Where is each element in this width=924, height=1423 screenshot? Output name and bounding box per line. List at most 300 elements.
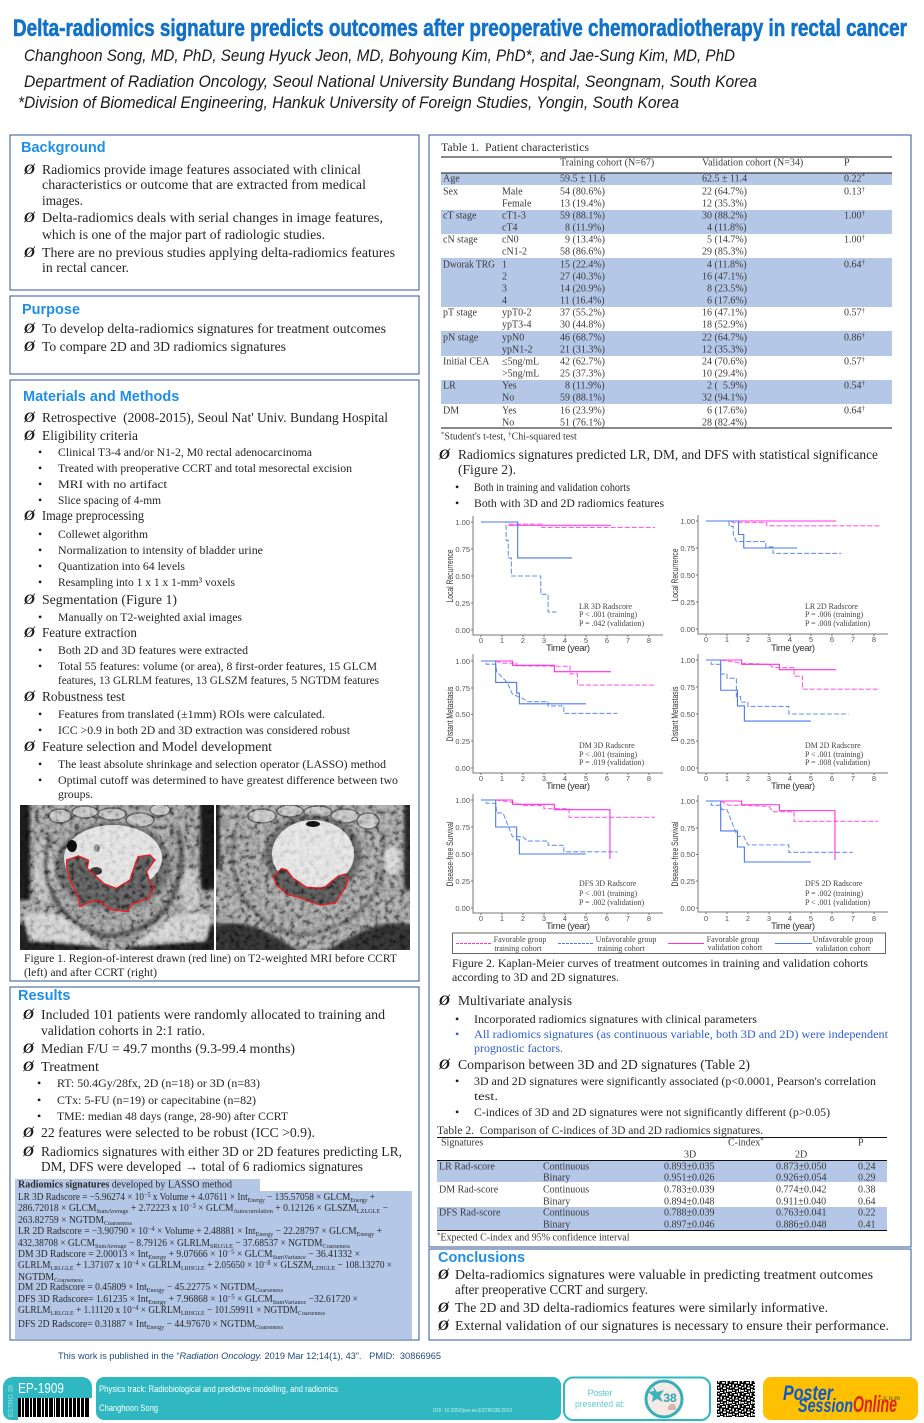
chart: DFS 3D Kaplan-Meier: 7 (626, 914, 630, 923)
table 2: C-indices comparison: 0.926±0.054 (776, 1172, 826, 1184)
chart: DFS 2D Kaplan-Meier: DFS 2D Radscore (805, 879, 863, 888)
chart: DFS 3D Kaplan-Meier: 0.00 (455, 904, 470, 913)
callout: radiomics signature formulas: DFS 3D Radscore= 1.61235 × IntEnergy + 7.96868 × 10−5 × GLCMSumVariance −32.61720 × (18, 1294, 358, 1306)
chart: DM 3D Kaplan-Meier: 5 (584, 774, 588, 783)
chart: DFS 3D Kaplan-Meier: 4 (563, 914, 567, 923)
table 2: C-indices comparison: 0.783±0.039 (664, 1184, 714, 1196)
caption: figure 1: (left) and after CCRT (right) (24, 965, 157, 979)
table 2: C-indices comparison: Binary (543, 1220, 570, 1230)
table 2: C-indices comparison: 0.38 (858, 1184, 876, 1196)
table 1: patient characteristics: 59.5 ± 11.6 (560, 174, 605, 185)
table 1: patient characteristics: 3 (502, 284, 507, 295)
chart: DFS 2D Kaplan-Meier: P = .002 (training) (805, 889, 863, 898)
chart: LR 2D Kaplan-Meier: 3 (767, 635, 771, 644)
chart: LR 2D Kaplan-Meier: 1 (725, 635, 729, 644)
chart: LR 2D Kaplan-Meier: 0.00 (680, 625, 695, 634)
text block: multivariate and comparison: • (455, 1027, 459, 1041)
table 1: patient characteristics: 8 (11.9%) (565, 381, 605, 392)
chart: DM 3D Kaplan-Meier: DM 3D Radscore (579, 741, 635, 750)
table 1: patient characteristics: 37 (55.2%) (560, 308, 605, 319)
text block: results bullets: Treatment (41, 1059, 99, 1074)
text block: methods bullets: features, 13 GLRLM features, 13 GLSZM features, 5 NGTDM features (58, 673, 379, 687)
chart: DFS 2D Kaplan-Meier: Disease-free Survival (670, 822, 681, 886)
logo: PosterSessionOnline: Online (853, 1391, 897, 1417)
text block: methods bullets (23, 410, 398, 801)
table 1: patient characteristics: 14 (20.9%) (560, 284, 605, 295)
table 1: patient characteristics: ypT0-2 (502, 308, 531, 319)
chart: DM 2D Kaplan-Meier: 7 (851, 774, 855, 783)
text block: multivariate and comparison: C-indices of 3D and 2D signatures were not significantly different (p>0.05) (474, 1105, 830, 1119)
table 1: patient characteristics: Table 1. Patient characteristics (441, 142, 590, 154)
chart: DM 2D Kaplan-Meier: 0 (704, 774, 708, 783)
panel: purpose (10, 296, 419, 374)
text block: results bullets: Ø (22, 1041, 35, 1057)
text block: background bullets: Ø (23, 162, 36, 178)
table 1: patient characteristics: 1 (502, 260, 507, 271)
table 2: C-indices comparison: 0.64 (858, 1196, 876, 1208)
text block: methods bullets: MRI with no artifact (58, 477, 168, 491)
table 1: patient characteristics: 30 (44.8%) (560, 320, 605, 331)
table 1: patient characteristics: ypN1-2 (502, 345, 533, 356)
chart: LR 2D Kaplan-Meier: P = .006 (training) (805, 610, 863, 619)
table 2: C-indices comparison: 0.774±0.042 (776, 1184, 826, 1196)
chart: DFS 2D Kaplan-Meier: 0.25 (680, 877, 695, 886)
logo: PosterSessionOnline: .com (880, 1395, 900, 1402)
chart: LR 2D Kaplan-Meier: 8 (872, 635, 876, 644)
text block: methods bullets: • (38, 610, 42, 624)
text block: multivariate and comparison: prognostic factors. (474, 1041, 563, 1055)
text block: multivariate and comparison: Ø (438, 993, 451, 1009)
chart legend: validation cohort (708, 943, 763, 952)
table 1: patient characteristics: 6 (17.6%) (707, 406, 747, 417)
chart: DM 2D Kaplan-Meier: 3 (767, 774, 771, 783)
table 1: patient characteristics: 9 (13.4%) (565, 235, 605, 246)
chart: DM 3D Kaplan-Meier: 7 (626, 774, 630, 783)
table 2: C-indices comparison: 0.886±0.048 (776, 1220, 826, 1230)
chart: DFS 3D Kaplan-Meier: Time (year) (546, 921, 590, 932)
text block: methods bullets: Quantization into 64 levels (58, 559, 185, 573)
chart: DM 2D Kaplan-Meier (670, 654, 888, 792)
text block: background bullets: in rectal cancer. (42, 260, 129, 275)
text block: multivariate and comparison: • (455, 1012, 459, 1026)
chart: DFS 3D Kaplan-Meier: Disease-free Survival (445, 822, 456, 886)
table 1: patient characteristics: 8 (23.5%) (707, 284, 747, 295)
footer: track information bar: Physics track: Radiobiological and predictive modelling, and radiomics (99, 1384, 338, 1394)
table 1: patient characteristics: 42 (62.7%) (560, 357, 605, 368)
chart: DM 3D Kaplan-Meier: 0 (479, 774, 483, 783)
text block: background bullets (23, 162, 395, 275)
chart: DFS 3D Kaplan-Meier: P = .002 (validation) (579, 898, 644, 907)
text block: KM findings: Radiomics signatures predicted LR, DM, and DFS with statistical significance (458, 447, 878, 462)
table 1: patient characteristics: cT1-3 (502, 211, 526, 222)
text block: methods bullets: Segmentation (Figure 1) (42, 592, 177, 607)
table 2: C-indices comparison: LR Rad-score (439, 1162, 495, 1172)
text block: methods bullets: ICC >0.9 in both 2D and 3D extraction was considered robust (58, 723, 351, 737)
text block: methods bullets: Retrospective (2008-2015), Seoul Nat' Univ. Bundang Hospital (42, 410, 388, 425)
authors and affiliations: Department of Radiation Oncology, Seoul National University Bundang Hospital, Seongnam, South Korea (24, 73, 757, 91)
text block: results bullets: RT: 50.4Gy/28fx, 2D (n=18) or 3D (n=83) (57, 1076, 260, 1090)
text block: purpose bullets: To develop delta-radiomics signatures for treatment outcomes (42, 321, 386, 336)
text block: KM findings: (Figure 2). (458, 462, 516, 477)
table 1: patient characteristics: 16 (23.9%) (560, 406, 605, 417)
text block: methods bullets: • (38, 575, 42, 589)
table 1: patient characteristics: Female (502, 199, 532, 210)
text block: KM findings: Both with 3D and 2D radiomics features (474, 496, 664, 510)
table 1: patient characteristics: 12 (35.3%) (702, 199, 747, 210)
text block: background bullets: images. (42, 193, 83, 208)
table 2: C-indices comparison: P (858, 1138, 864, 1148)
text block: results bullets: • (37, 1093, 41, 1107)
text block: methods bullets: Slice spacing of 4-mm (58, 493, 162, 507)
table 1: patient characteristics: 8 (11.9%) (565, 223, 605, 234)
chart: DM 3D Kaplan-Meier: 6 (605, 774, 609, 783)
chart: LR 3D Kaplan-Meier: 2 (521, 636, 525, 645)
text block: multivariate and comparison: • (455, 1074, 459, 1088)
chart: DM 2D Kaplan-Meier: P < .001 (training) (805, 750, 863, 759)
chart: LR 2D Kaplan-Meier: P = .008 (validation) (805, 619, 870, 628)
chart: LR 3D Kaplan-Meier: 3 (542, 636, 546, 645)
table 1: patient characteristics: 29 (85.3%) (702, 247, 747, 258)
table 1: patient characteristics: 51 (76.1%) (560, 418, 605, 429)
table 1: patient characteristics: cN stage (443, 235, 478, 246)
chart legend: training cohort (494, 944, 542, 953)
footer: track information bar (96, 1377, 561, 1420)
chart: DM 2D Kaplan-Meier: 4 (788, 774, 792, 783)
text block: conclusions bullets (437, 1267, 889, 1334)
publication note: This work is published in the “Radiation Oncology. 2019 Mar 12;14(1), 43”. PMID: 30866965 (58, 1351, 441, 1362)
text block: background bullets: Delta-radiomics deals with serial changes in image features, (42, 210, 383, 225)
callout: radiomics signature formulas: DM 3D Radscore = 2.00013 × IntEnergy + 9.07666 × 10−5 × GLCMSumVariance − 36.41332 × (18, 1249, 360, 1261)
table 1: patient characteristics: 2 ( 5.9%) (707, 381, 747, 392)
chart: DFS 3D Kaplan-Meier: 1 (500, 914, 504, 923)
table 1: patient characteristics: 24 (70.6%) (702, 357, 747, 368)
chart: DM 3D Kaplan-Meier: 1.00 (455, 657, 470, 666)
table 1: patient characteristics: 16 (47.1%) (702, 272, 747, 283)
table 1: patient characteristics: cN1-2 (502, 247, 527, 258)
chart: LR 3D Kaplan-Meier: 1.00 (455, 518, 470, 527)
chart: DM 2D Kaplan-Meier: P = .008 (validation) (805, 758, 870, 767)
table 1: patient characteristics: P (844, 158, 850, 169)
text block: methods bullets: Optimal cutoff was determined to have greatest difference between two (58, 773, 398, 787)
text block: methods bullets: Feature selection and Model development (42, 739, 272, 754)
chart: DFS 2D Kaplan-Meier (670, 795, 888, 932)
panel: conclusions (429, 1249, 911, 1340)
authors and affiliations: *Division of Biomedical Engineering, Hankuk University of Foreign Studies, Yongin, South Korea (18, 94, 679, 112)
table 1: patient characteristics: 4 (11.8%) (707, 223, 747, 234)
text block: purpose bullets: Ø (23, 339, 36, 355)
chart: LR 2D Kaplan-Meier: 0.50 (680, 571, 695, 580)
text block: results bullets: Radiomics signatures with either 3D or 2D features predicting LR, (41, 1144, 402, 1159)
text block: background bullets: Ø (23, 210, 36, 226)
table 2: C-indices comparison: DM Rad-score (439, 1184, 499, 1196)
table 1: patient characteristics: 5 (14.7%) (707, 235, 747, 246)
table 2: C-indices comparison: *Expected C-index and 95% confidence interval (437, 1232, 630, 1244)
chart: LR 2D Kaplan-Meier: Time (year) (771, 643, 815, 654)
heading: conclusions: Conclusions (438, 1250, 525, 1266)
panel: materials and methods (10, 380, 419, 981)
footer: poster id badge (3, 1377, 92, 1420)
table 2: C-indices comparison: Signatures (441, 1138, 483, 1148)
text block: multivariate and comparison: Incorporated radiomics signatures with clinical parameters (474, 1012, 757, 1026)
chart: LR 3D Kaplan-Meier: 0 (479, 636, 483, 645)
table 1: patient characteristics: 27 (40.3%) (560, 272, 605, 283)
table 1: patient characteristics: pT stage (443, 308, 478, 319)
panel: right column (429, 135, 911, 1247)
table 1: patient characteristics: DM (443, 406, 459, 417)
table 2: C-indices comparison: 0.911±0.040 (776, 1196, 826, 1208)
icon: QR code (717, 1381, 755, 1417)
text block: conclusions bullets: External validation of our signatures is necessary to ensure their performance. (455, 1318, 889, 1333)
table 1: patient characteristics: 15 (22.4%) (560, 260, 605, 271)
chart: DFS 2D Kaplan-Meier: 0 (704, 914, 708, 923)
table 1: patient characteristics: pN stage (443, 333, 479, 344)
text block: methods bullets: • (38, 527, 42, 541)
chart: DM 2D Kaplan-Meier: 5 (809, 774, 813, 783)
chart: DFS 3D Kaplan-Meier: 0 (479, 914, 483, 923)
chart: LR 2D Kaplan-Meier: 4 (788, 635, 792, 644)
table 1: patient characteristics: 54 (80.6%) (560, 187, 605, 198)
chart: LR 2D Kaplan-Meier: 1.00 (680, 517, 695, 526)
text block: results bullets: Ø (22, 1125, 35, 1141)
logo: PosterSessionOnline: Poster (783, 1382, 834, 1405)
chart: DM 2D Kaplan-Meier: DM 2D Radscore (805, 741, 861, 750)
heading: background: Background (21, 140, 106, 156)
table 1: patient characteristics: cT4 (502, 223, 518, 234)
table 1: patient characteristics: Initial CEA (443, 357, 490, 368)
text block: results bullets: • (37, 1076, 41, 1090)
chart: DM 3D Kaplan-Meier: 0.00 (455, 764, 470, 773)
text block: methods bullets: Ø (23, 739, 36, 755)
table 2: C-indices comparison: Continuous (543, 1184, 589, 1196)
table 1: patient characteristics: 0.54† (844, 381, 866, 392)
chart: DFS 2D Kaplan-Meier: 1.00 (680, 797, 695, 806)
text block: methods bullets: Ø (23, 508, 36, 524)
table 1: patient characteristics: 0.64† (844, 260, 866, 271)
text block: methods bullets: • (38, 445, 42, 459)
caption: figure 2 (452, 956, 868, 984)
chart: DM 3D Kaplan-Meier: 3 (542, 774, 546, 783)
chart: DM 2D Kaplan-Meier: Distant Metastasis (670, 686, 681, 742)
chart legend (452, 933, 886, 954)
chart: LR 3D Kaplan-Meier: 5 (584, 636, 588, 645)
chart legend: Unfavorable group (596, 935, 656, 944)
text block: methods bullets: Feature extraction (42, 625, 137, 640)
chart: DFS 3D Kaplan-Meier: 8 (647, 914, 651, 923)
text block: methods bullets: • (38, 757, 42, 771)
heading: results: Results (18, 988, 70, 1004)
chart: LR 3D Kaplan-Meier: Local Recurrence (445, 550, 456, 602)
text block: methods bullets: • (38, 493, 42, 507)
table 1: patient characteristics: ≤5ng/mL (502, 357, 539, 368)
table 1: patient characteristics: Training cohort (N=67) (560, 158, 654, 169)
panel: background (10, 135, 419, 290)
text block: methods bullets: Resampling into 1 x 1 x 1-mm³ voxels (58, 575, 235, 589)
callout: radiomics signature formulas: Radiomics signatures developed by LASSO method (18, 1180, 232, 1190)
caption: figure 1: Figure 1. Region-of-interest drawn (red line) on T2-weighted MRI before CCRT (24, 951, 398, 965)
table 1: patient characteristics: ypT3-4 (502, 320, 531, 331)
table 1: patient characteristics: ypN0 (502, 333, 524, 344)
table 2: C-indices comparison: 0.29 (858, 1172, 876, 1184)
table 1: patient characteristics: Male (502, 187, 523, 198)
table 1: patient characteristics: 0.57† (844, 308, 866, 319)
table 2: C-indices comparison: Continuous (543, 1162, 589, 1172)
text block: results bullets: Included 101 patients were randomly allocated to training and (41, 1007, 385, 1022)
chart: DM 3D Kaplan-Meier: 0.50 (455, 710, 470, 719)
chart: DFS 2D Kaplan-Meier: 8 (872, 914, 876, 923)
table 1: patient characteristics: *Student's t-test, †Chi-squared test (441, 432, 577, 443)
caption: figure 2: according to 3D and 2D signatures. (452, 970, 619, 984)
text block: methods bullets: • (38, 543, 42, 557)
chart: LR 2D Kaplan-Meier: 5 (809, 635, 813, 644)
table 1: patient characteristics: 58 (86.6%) (560, 247, 605, 258)
text block: results bullets: Median F/U = 49.7 months (9.3-99.4 months) (41, 1041, 295, 1056)
text block: methods bullets: • (38, 659, 42, 673)
text block: conclusions bullets: Ø (437, 1300, 450, 1316)
table 1: patient characteristics: 2 (502, 272, 507, 283)
chart: DFS 2D Kaplan-Meier: 7 (851, 914, 855, 923)
chart: LR 2D Kaplan-Meier (670, 515, 888, 654)
chart: DFS 2D Kaplan-Meier: 0.50 (680, 850, 695, 859)
text block: results bullets: 22 features were selected to be robust (ICC >0.9). (41, 1125, 315, 1140)
text block: methods bullets: Robustness test (42, 689, 125, 704)
chart: LR 2D Kaplan-Meier: Local Recurrence (670, 548, 681, 602)
text block: methods bullets: Total 55 features: volume (or area), 8 first-order features, 15 GLCM (58, 659, 377, 673)
chart: LR 3D Kaplan-Meier: 4 (563, 636, 567, 645)
text block: background bullets: Ø (23, 245, 36, 261)
heading: materials and methods: Materials and Methods (23, 389, 179, 405)
chart: DFS 3D Kaplan-Meier: 0.25 (455, 877, 470, 886)
heading: purpose: Purpose (22, 302, 80, 318)
table 1: patient characteristics: 46 (68.7%) (560, 333, 605, 344)
chart: DFS 2D Kaplan-Meier: 6 (830, 914, 834, 923)
chart legend: Favorable group (494, 935, 546, 944)
chart: LR 3D Kaplan-Meier: P = .042 (validation) (579, 619, 644, 628)
table 1: patient characteristics: 4 (502, 296, 507, 307)
text block: conclusions bullets: Delta-radiomics signatures were valuable in predicting treatment outcomes (455, 1267, 873, 1282)
text block: results bullets: • (37, 1109, 41, 1123)
chart: DM 2D Kaplan-Meier: 0.50 (680, 710, 695, 719)
text block: results bullets: Ø (22, 1007, 35, 1023)
text block: multivariate and comparison: Multivariate analysis (458, 993, 572, 1008)
chart: DFS 3D Kaplan-Meier: 1.00 (455, 796, 470, 805)
chart: DM 3D Kaplan-Meier: P = .019 (validation) (579, 758, 644, 767)
chart: DM 3D Kaplan-Meier (445, 654, 663, 792)
text block: KM findings: Ø (438, 447, 451, 463)
table 2: C-indices comparison: 0.24 (858, 1162, 876, 1172)
chart: DM 2D Kaplan-Meier: 0.25 (680, 737, 695, 746)
text block: methods bullets: Ø (23, 592, 36, 608)
table 2: C-indices comparison: 0.788±0.039 (664, 1208, 714, 1218)
chart: DM 3D Kaplan-Meier: P < .001 (training) (579, 750, 637, 759)
text block: KM findings: • (455, 480, 459, 494)
chart: LR 3D Kaplan-Meier (445, 516, 663, 654)
table 1: patient characteristics: 13 (19.4%) (560, 199, 605, 210)
table 2: C-indices comparison: Continuous (543, 1208, 589, 1218)
table 1: patient characteristics: 59 (88.1%) (560, 211, 605, 222)
chart: DM 2D Kaplan-Meier: 0.00 (680, 764, 695, 773)
callout: radiomics signature formulas: 432.38708 × GLCMSumAverage − 8.79126 × GLRLMSRLGLE − 37.68537 × NGTDMCoarseness (18, 1238, 350, 1250)
chart: DFS 2D Kaplan-Meier: 2 (746, 914, 750, 923)
chart: DFS 3D Kaplan-Meier: 3 (542, 914, 546, 923)
table 1: patient characteristics: 16 (47.1%) (702, 308, 747, 319)
chart: DM 2D Kaplan-Meier: 2 (746, 774, 750, 783)
footer: track information bar: DOI: 10.3252/pso.eu.ESTRO38.2019 (433, 1408, 512, 1414)
chart: LR 2D Kaplan-Meier: 0.75 (680, 544, 695, 553)
text block: results bullets: Ø (22, 1144, 35, 1160)
table 1: patient characteristics: Dworak TRG (443, 260, 495, 271)
chart: LR 3D Kaplan-Meier: LR 3D Radscore (579, 602, 633, 611)
text block: methods bullets: Ø (23, 625, 36, 641)
text block: multivariate and comparison: test. (474, 1089, 498, 1103)
table 1: patient characteristics: 22 (64.7%) (702, 187, 747, 198)
chart: DM 3D Kaplan-Meier: 0.75 (455, 684, 470, 693)
table 2: C-indices comparison: Binary (543, 1172, 570, 1184)
barcode (18, 1398, 89, 1417)
chart: LR 2D Kaplan-Meier: 7 (851, 635, 855, 644)
text block: KM findings: • (455, 496, 459, 510)
chart: LR 3D Kaplan-Meier: 0.25 (455, 599, 470, 608)
footer: poster presented at (564, 1378, 710, 1420)
table 1: patient characteristics: No (502, 418, 514, 429)
chart: LR 2D Kaplan-Meier: LR 2D Radscore (805, 602, 859, 611)
chart: DM 2D Kaplan-Meier: 0.75 (680, 683, 695, 692)
text block: methods bullets: Manually on T2-weighted axial images (58, 610, 242, 624)
table 1: patient characteristics: Yes (502, 381, 517, 392)
footer: track information bar: Changhoon Song (99, 1403, 158, 1413)
chart: LR 3D Kaplan-Meier: 1 (500, 636, 504, 645)
text block: methods bullets: Ø (23, 428, 36, 444)
chart: DFS 2D Kaplan-Meier: Time (year) (771, 921, 815, 932)
table 1: patient characteristics: >5ng/mL (502, 369, 539, 380)
table 1: patient characteristics: LR (443, 381, 456, 392)
table 1: patient characteristics: 12 (35.3%) (702, 345, 747, 356)
chart: LR 3D Kaplan-Meier: Time (year) (546, 643, 590, 654)
table 2: C-indices comparison: 0.951±0.026 (664, 1172, 714, 1184)
table 2: C-indices comparison: 0.873±0.050 (776, 1162, 826, 1172)
text block: background bullets: Radiomics provide image features associated with clinical (42, 162, 361, 177)
chart: DM 3D Kaplan-Meier: 4 (563, 774, 567, 783)
chart legend: Favorable group (707, 935, 759, 944)
chart: LR 2D Kaplan-Meier: 0 (704, 635, 708, 644)
image: MRI after CCRT with red ROI (216, 805, 410, 950)
callout: radiomics signature formulas: LR 2D Radscore = −3.90790 × 10−4 × Volume + 2.48881 × IntEnergy − 22.28797 × GLCMEnergy + (18, 1226, 382, 1238)
chart legend: validation cohort (816, 944, 871, 953)
text block: results bullets: validation cohorts in 2:1 ratio. (41, 1023, 205, 1038)
text block: multivariate and comparison: Ø (438, 1057, 451, 1073)
chart: DFS 3D Kaplan-Meier: P < .001 (training) (579, 889, 637, 898)
chart: DM 3D Kaplan-Meier: 1 (500, 774, 504, 783)
icon: ESTRO 38 logo (646, 1381, 682, 1417)
chart: DFS 2D Kaplan-Meier: 0.00 (680, 904, 695, 913)
authors and affiliations (18, 47, 757, 112)
text block: results bullets: TME: median 48 days (range, 28-90) after CCRT (57, 1109, 289, 1123)
table 1: patient characteristics: 28 (82.4%) (702, 418, 747, 429)
panel: results (10, 987, 419, 1340)
text block: methods bullets: • (38, 723, 42, 737)
text block: multivariate and comparison (438, 993, 889, 1119)
chart: DFS 2D Kaplan-Meier: P < .001 (validation) (805, 898, 870, 907)
text block: methods bullets: • (38, 477, 42, 491)
table 1: patient characteristics: 0.22* (844, 174, 866, 185)
chart: DM 3D Kaplan-Meier: Time (year) (546, 781, 590, 792)
text block: results bullets: CTx: 5-FU (n=19) or capecitabine (n=82) (57, 1093, 256, 1107)
table 1: patient characteristics: 4 (11.8%) (707, 260, 747, 271)
table 2: C-indices comparison: 0.897±0.046 (664, 1220, 714, 1230)
table 1: patient characteristics: Yes (502, 406, 517, 417)
text block: conclusions bullets: after preoperative CCRT and surgery. (455, 1282, 648, 1297)
text block: results bullets (22, 1007, 402, 1174)
text block: multivariate and comparison: All radiomics signatures (as continuous variable, both 3D and 2D) were independent (474, 1027, 889, 1041)
